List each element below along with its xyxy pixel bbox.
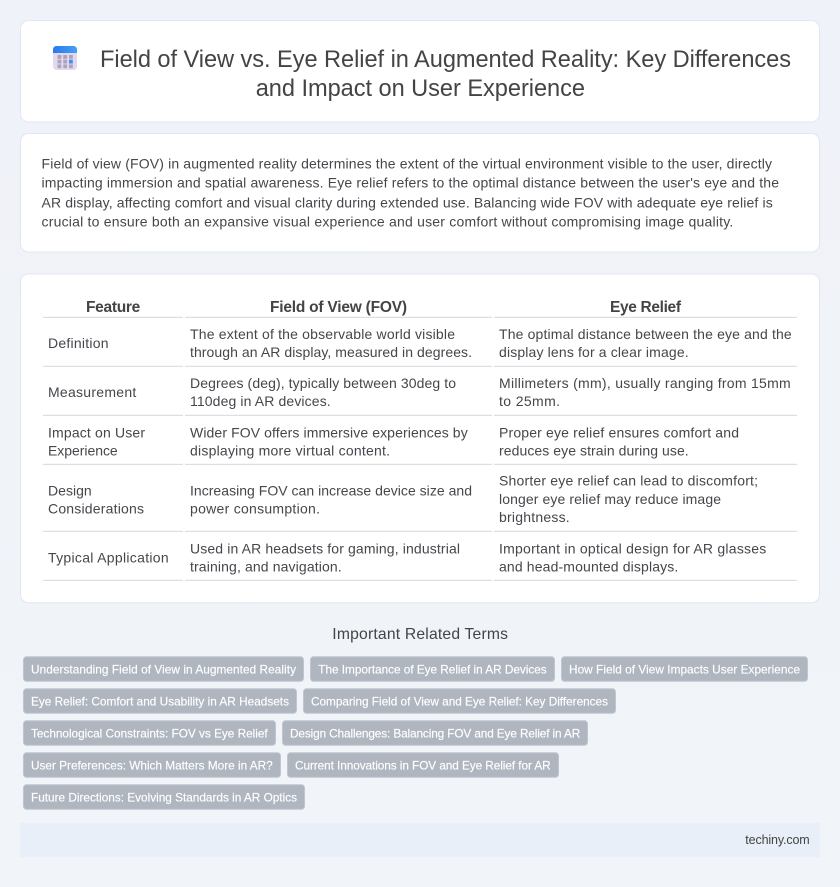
row: design considerations <box>48 473 758 525</box>
tag row 1: The Importance of Eye Relief in AR Devices <box>318 662 547 676</box>
row: impact on user experience: reduces eye strain during use. <box>499 442 689 458</box>
panel: comparison table <box>20 274 820 603</box>
row: design considerations: Increasing FOV can increase device size and <box>190 482 472 498</box>
tag row 2: Comparing Field of View and Eye Relief: Key Differences <box>311 694 608 708</box>
panel: introduction paragraph <box>20 134 820 252</box>
tag row 1: How Field of View Impacts User Experience <box>569 662 800 676</box>
row: design considerations: Considerations <box>48 500 144 516</box>
tag row 4 <box>24 753 558 777</box>
row: typical application <box>48 540 766 574</box>
tag row 2 <box>24 689 616 713</box>
row: measurement: 110deg in AR devices. <box>190 393 331 409</box>
footer: techiny.com <box>745 833 810 847</box>
row: impact on user experience: Impact on User <box>48 424 145 440</box>
tag row 2: Eye Relief: Comfort and Usability in AR Headsets <box>31 694 289 708</box>
row: design considerations: longer eye relief may reduce image <box>499 491 721 507</box>
row: measurement: to 25mm. <box>499 393 560 409</box>
tag row 4: User Preferences: Which Matters More in AR? <box>31 758 273 772</box>
row: design considerations: brightness. <box>499 509 570 525</box>
heading: important related terms: Important Related Terms <box>332 626 508 643</box>
icon: calendar <box>53 46 77 70</box>
table header row: Field of View (FOV) <box>270 299 407 316</box>
row: impact on user experience: Proper eye relief ensures comfort and <box>499 424 739 440</box>
panel: related term tags <box>24 657 808 809</box>
row: definition: The extent of the observable world visible <box>190 326 455 342</box>
tag row 3: Design Challenges: Balancing FOV and Eye Relief in AR <box>290 726 580 740</box>
row: measurement: Degrees (deg), typically between 30deg to <box>190 375 456 391</box>
footer <box>20 823 820 857</box>
row: design considerations: Design <box>48 482 92 498</box>
tag row 5: Future Directions: Evolving Standards in AR Optics <box>31 790 297 804</box>
row: impact on user experience: Experience <box>48 442 118 458</box>
row: measurement: Millimeters (mm), usually ranging from 15mm <box>499 375 791 391</box>
panel: introduction paragraph: impacting immersion and spatial awareness. Eye relief refers to the optimal distance between the user's eye and the <box>42 175 779 191</box>
panel: title header <box>20 20 820 122</box>
tag row 3 <box>24 721 588 745</box>
row: impact on user experience <box>48 424 739 458</box>
panel: introduction paragraph: AR display, affecting comfort and visual clarity during extended use. Balancing wide FOV with adequate eye relief is <box>42 194 773 210</box>
row: design considerations: power consumption. <box>190 500 320 516</box>
row: typical application: Typical Application <box>48 549 169 565</box>
panel: introduction paragraph: Field of view (FOV) in augmented reality determines the extent of the virtual environment visible to the user, directly <box>42 155 772 171</box>
row: measurement <box>48 375 791 409</box>
row: typical application: Important in optical design for AR glasses <box>499 540 766 556</box>
tag row 3: Technological Constraints: FOV vs Eye Relief <box>31 726 268 740</box>
tag row 5 <box>24 785 304 809</box>
title: and Impact on User Experience <box>256 76 585 102</box>
table header row <box>86 299 682 316</box>
row: definition: through an AR display, measured in degrees. <box>190 344 472 360</box>
row: typical application: Used in AR headsets for gaming, industrial <box>190 540 460 556</box>
row: definition: display lens for a clear image. <box>499 344 689 360</box>
tag row 1: Understanding Field of View in Augmented Reality <box>31 662 296 676</box>
row: typical application: training, and navigation. <box>190 558 342 574</box>
row: design considerations: Shorter eye relief can lead to discomfort; <box>499 473 758 489</box>
row: measurement: Measurement <box>48 384 136 400</box>
panel: introduction paragraph: crucial to ensure both an expansive visual experience and user comfort without compromising image quality. <box>42 214 733 230</box>
row: definition <box>48 326 792 360</box>
row: definition: The optimal distance between the eye and the <box>499 326 792 342</box>
row: impact on user experience: displaying more virtual content. <box>190 442 390 458</box>
row: typical application: and head-mounted displays. <box>499 558 678 574</box>
tag row 4: Current Innovations in FOV and Eye Relief for AR <box>295 758 551 772</box>
table header row: Eye Relief <box>610 299 682 316</box>
tag row 1 <box>24 657 808 681</box>
title: Field of View vs. Eye Relief in Augmented Reality: Key Differences <box>100 47 791 73</box>
title <box>100 47 791 102</box>
row: definition: Definition <box>48 335 109 351</box>
row: impact on user experience: Wider FOV offers immersive experiences by <box>190 424 468 440</box>
table header row: Feature <box>86 299 141 316</box>
